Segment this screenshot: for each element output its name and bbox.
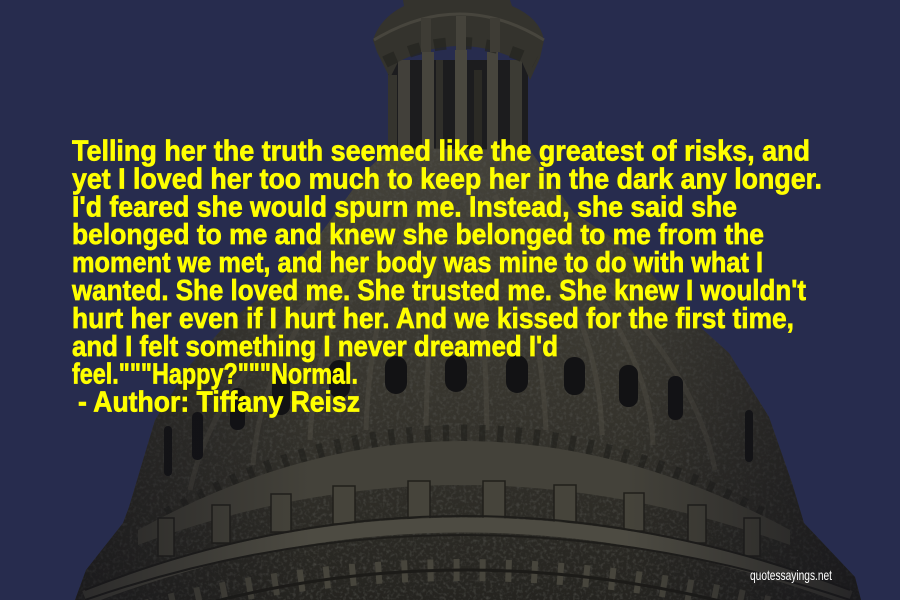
quote line 3: I'd feared she would spurn me. Instead, she said she: [72, 191, 737, 223]
quote line 6: wanted. She loved me. She trusted me. She knew I wouldn't: [71, 275, 806, 307]
tower colonnade: [388, 50, 528, 170]
dome windows: [164, 355, 753, 476]
stone grain texture: [75, 148, 861, 600]
tower cap: [373, 0, 544, 80]
dentil row: [95, 570, 835, 600]
side shading: [75, 148, 861, 600]
quote line 8: and I felt something I never dreamed I'd: [72, 331, 558, 363]
quote line 2: yet I loved her too much to keep her in the dark any longer.: [72, 163, 822, 195]
quote line 5: moment we met, and her body was mine to do with what I: [72, 247, 763, 279]
plain dome band: [138, 441, 790, 545]
watermark: quotessayings.net: [750, 567, 832, 583]
drum pilasters: [158, 481, 760, 556]
drum cornice: [85, 516, 850, 600]
dome ornament row: [170, 438, 760, 520]
quote text: [71, 136, 822, 419]
lower frieze: [150, 570, 790, 600]
dome ribs: [190, 190, 715, 490]
quote line 9: feel."""Happy?"""Normal.: [72, 359, 358, 391]
quote line 4: belonged to me and knew she belonged to me from the: [72, 219, 764, 251]
author attribution: - Author: Tiffany Reisz: [78, 387, 360, 419]
quote line 1: Telling her the truth seemed like the greatest of risks, and: [72, 136, 810, 168]
main dome silhouette: [75, 148, 861, 600]
quote line 7: hurt her even if I hurt her. And we kissed for the first time,: [72, 303, 794, 335]
